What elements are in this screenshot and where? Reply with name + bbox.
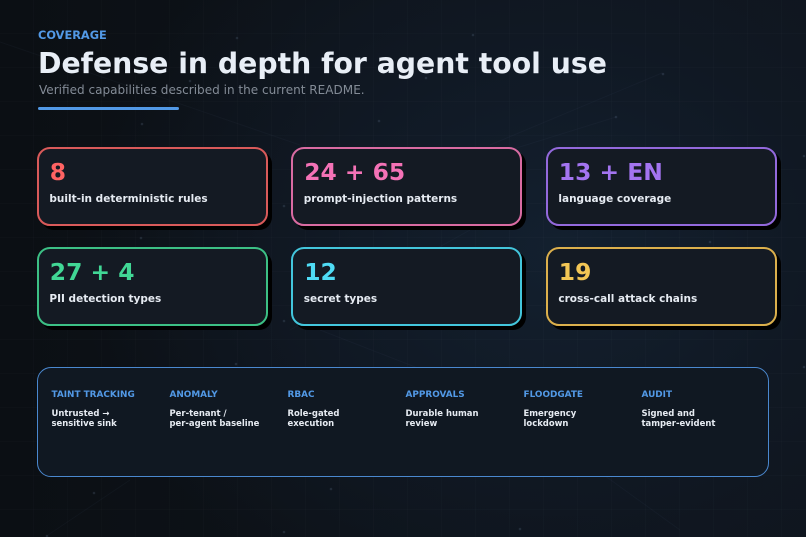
heading: rbac: RBAC bbox=[288, 390, 314, 400]
column: anomaly bbox=[170, 390, 259, 428]
stat: 13 + EN: 13 + EN bbox=[559, 158, 663, 186]
text: taint tracking description: sensitive sink bbox=[52, 418, 117, 428]
accent underline bbox=[38, 107, 179, 110]
text: audit description: Signed and bbox=[642, 408, 695, 418]
card: prompt-injection patterns bbox=[291, 147, 522, 226]
label: built-in deterministic rules: built-in deterministic rules bbox=[49, 193, 208, 205]
text: anomaly description bbox=[170, 408, 259, 428]
text: floodgate description: lockdown bbox=[524, 418, 568, 428]
text: approvals description: review bbox=[406, 418, 437, 428]
stat: 12: 12 bbox=[304, 258, 337, 286]
text: approvals description: Durable human bbox=[406, 408, 478, 418]
card: secret types bbox=[291, 247, 522, 326]
stat: 8: 8 bbox=[50, 158, 66, 186]
label: prompt-injection patterns: prompt-injection patterns bbox=[304, 193, 457, 205]
text: approvals description bbox=[406, 408, 478, 428]
label: secret types: secret types bbox=[304, 293, 377, 305]
heading: taint tracking: TAINT TRACKING bbox=[52, 390, 135, 400]
panel: control layers bbox=[37, 367, 769, 477]
text: floodgate description bbox=[524, 408, 576, 428]
text: floodgate description: Emergency bbox=[524, 408, 576, 418]
column: rbac bbox=[288, 390, 339, 428]
text: audit description: tamper-evident bbox=[642, 418, 715, 428]
eyebrow: coverage: COVERAGE bbox=[38, 28, 107, 42]
text: anomaly description: per-agent baseline bbox=[170, 418, 259, 428]
column: approvals bbox=[406, 390, 478, 428]
card: built-in rules bbox=[37, 147, 268, 226]
card: cross-call attack chains bbox=[546, 247, 777, 326]
column: taint tracking bbox=[52, 390, 135, 428]
label: PII detection types: PII detection types bbox=[49, 293, 161, 305]
stat: 24 + 65: 24 + 65 bbox=[304, 158, 405, 186]
text: rbac description bbox=[288, 408, 339, 428]
text: anomaly description: Per-tenant / bbox=[170, 408, 227, 418]
text: rbac description: Role-gated bbox=[288, 408, 339, 418]
subtitle: Verified capabilities described in the current README. bbox=[39, 83, 365, 97]
heading: floodgate: FLOODGATE bbox=[524, 390, 583, 400]
heading: audit: AUDIT bbox=[642, 390, 672, 400]
stat: 19: 19 bbox=[559, 258, 591, 286]
card: language coverage bbox=[546, 147, 777, 226]
stat: 27 + 4: 27 + 4 bbox=[50, 258, 135, 286]
text: rbac description: execution bbox=[288, 418, 334, 428]
text: audit description bbox=[642, 408, 716, 428]
label: language coverage: language coverage bbox=[558, 193, 671, 205]
column: audit bbox=[642, 390, 716, 428]
title: Defense in depth for agent tool use bbox=[38, 46, 607, 80]
heading: approvals: APPROVALS bbox=[406, 390, 465, 400]
label: cross-call attack chains: cross-call attack chains bbox=[558, 293, 697, 305]
card: PII detection types bbox=[37, 247, 268, 326]
heading: anomaly: ANOMALY bbox=[170, 390, 218, 400]
column: floodgate bbox=[524, 390, 583, 428]
text: taint tracking description bbox=[52, 408, 117, 428]
text: taint tracking description: Untrusted → bbox=[52, 408, 109, 418]
